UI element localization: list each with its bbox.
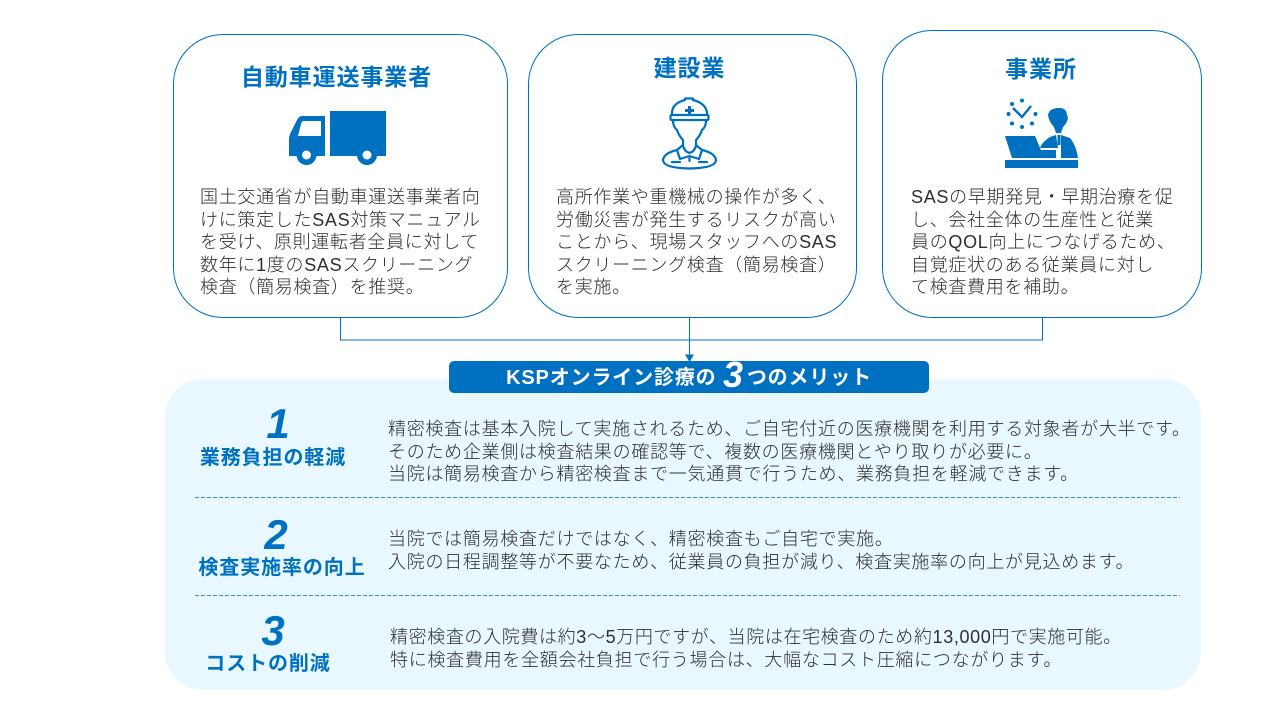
panel: 自動車運送事業者 — [173, 34, 508, 318]
text: 事業所の説明: て検査費用を補助。 — [911, 277, 1079, 297]
text: 事業所の説明: 員のQOL向上につなげるため、 — [911, 232, 1176, 252]
text: merit 2 description: 当院では簡易検査だけではなく、精密検査もご自宅で実施。 — [388, 529, 893, 549]
text: 建設業の説明: スクリーニング検査（簡易検査） — [556, 254, 836, 274]
heading: 事業所: 事業所 — [1005, 56, 1077, 82]
icon: office worker at desk — [1005, 98, 1078, 168]
text: 建設業の説明: 労働災害が発生するリスクが高い — [556, 210, 836, 230]
icon: construction worker — [662, 97, 718, 170]
text: merit 1 description — [388, 419, 1191, 484]
text: 事業所の説明 — [911, 187, 1176, 297]
text: 建設業の説明 — [556, 187, 837, 297]
number 3: 3 — [261, 607, 285, 654]
text: 自動車運送事業者の説明: 数年に1度のSASスクリーニング — [200, 254, 473, 274]
label: 検査実施率の向上: 検査実施率の向上 — [198, 557, 366, 579]
merit 3 — [205, 607, 1122, 675]
panel: merits background — [165, 379, 1201, 690]
heading: 建設業: 建設業 — [654, 55, 725, 81]
merit 1 — [200, 400, 1191, 484]
text: merit 2 description: 入院の日程調整等が不要なため、従業員の負担が減り、検査実施率の向上が見込めます。 — [388, 552, 1134, 572]
panel: 建設業 — [528, 34, 857, 318]
text: merit 3 description — [390, 627, 1122, 670]
label: コストの削減: コストの削減 — [205, 653, 331, 675]
number 2: 2 — [264, 511, 288, 558]
text: 自動車運送事業者の説明: けに策定したSAS対策マニュアル — [200, 210, 481, 230]
text: merit 3 description: 精密検査の入院費は約3～5万円ですが、当院は在宅検査のため約13,000円で実施可能。 — [390, 627, 1122, 647]
text: merit 1 description: 精密検査は基本入院して実施されるため、ご自宅付近の医療機関を利用する対象者が大半です。 — [388, 419, 1191, 439]
text: 自動車運送事業者の説明: 検査（簡易検査）を推奨。 — [200, 277, 424, 297]
text: 自動車運送事業者の説明: を受け、原則運転者全員に対して — [200, 232, 479, 252]
text: merit 1 description: そのため企業側は検査結果の確認等で、複数の医療機関とやり取りが必要に。 — [388, 442, 1042, 462]
text: merit 2 description — [388, 529, 1134, 572]
text: 事業所の説明: SASの早期発見・早期治療を促 — [911, 187, 1174, 207]
label: 業務負担の軽減: 業務負担の軽減 — [200, 447, 346, 469]
text: 建設業の説明: 高所作業や重機械の操作が多く、 — [556, 187, 836, 207]
heading: 自動車運送事業者: 自動車運送事業者 — [241, 64, 432, 90]
icon: truck — [289, 111, 386, 165]
text: 建設業の説明: ことから、現場スタッフへのSAS — [556, 232, 837, 252]
panel: 事業所 — [882, 30, 1202, 318]
connector arrow — [340, 318, 1043, 361]
text: 自動車運送事業者の説明: 国土交通省が自動車運送事業者向 — [200, 187, 480, 207]
header bar: KSPオンライン診療の3つのメリット: KSPオンライン診療の 3つのメリット — [506, 354, 872, 395]
text: merit 3 description: 特に検査費用を全額会社負担で行う場合は、大幅なコスト圧縮につながります。 — [390, 650, 1062, 670]
header bar: KSPオンライン診療の3つのメリット — [449, 361, 929, 393]
text: 自動車運送事業者の説明 — [200, 187, 481, 297]
text: 建設業の説明: を実施。 — [556, 277, 631, 297]
merit 2 — [198, 511, 1134, 579]
text: 事業所の説明: 自覚症状のある従業員に対し — [911, 254, 1154, 274]
number 1: 1 — [266, 400, 290, 447]
text: 事業所の説明: し、会社全体の生産性と従業 — [911, 210, 1154, 230]
text: merit 1 description: 当院は簡易検査から精密検査まで一気通貫で行うため、業務負担を軽減できます。 — [388, 464, 1079, 484]
